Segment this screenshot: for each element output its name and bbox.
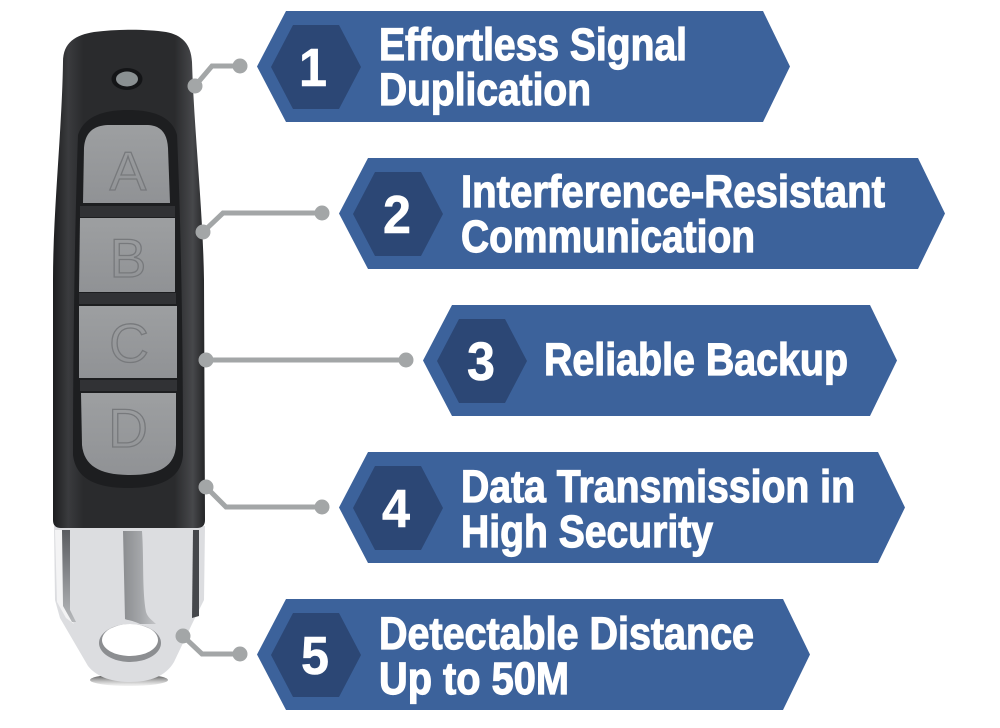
button D: D [108, 397, 148, 459]
banner 5: 5 [301, 626, 329, 686]
badge 3 [437, 319, 527, 403]
heading 5: Detectable Distance [379, 608, 754, 659]
chrome left reflection [62, 530, 76, 622]
badge 2 [353, 172, 443, 256]
heading 3: Reliable Backup [544, 334, 848, 385]
badge 4 [353, 466, 443, 550]
button recess [73, 110, 183, 488]
badge 5 [271, 613, 361, 697]
connector 2 [196, 206, 330, 240]
remote control [53, 30, 205, 686]
chrome right reflection [192, 530, 199, 618]
banner 1: 1 [299, 38, 327, 98]
banner 1 [257, 11, 790, 122]
keyring hole [99, 624, 161, 662]
banner 2: 2 [383, 185, 411, 245]
chrome centre band [123, 531, 156, 624]
banner 3: 3 [467, 332, 495, 392]
connector 3 [198, 352, 414, 368]
badge 1 [271, 25, 361, 109]
button D [81, 393, 176, 475]
heading 2: Communication [461, 211, 755, 262]
connector 1 [188, 58, 248, 94]
LED indicator [112, 68, 142, 90]
banner 2 [339, 158, 945, 269]
banner 4: 4 [382, 479, 410, 539]
button divider AB [80, 206, 175, 217]
heading 4: Data Transmission in [461, 461, 855, 512]
banner 3 [423, 305, 897, 416]
heading 4: High Security [461, 506, 713, 557]
banner 5 [257, 599, 810, 710]
heading 2: Interference-Resistant [461, 166, 885, 217]
button divider BC [79, 293, 176, 304]
button C [79, 306, 177, 378]
connector 4 [198, 480, 330, 514]
heading 5: Up to 50M [379, 653, 569, 704]
button A [83, 125, 170, 203]
banner 4 [339, 452, 905, 563]
heading 1: Effortless Signal [379, 19, 687, 70]
heading 1: Duplication [379, 64, 591, 115]
button C: C [109, 312, 149, 374]
button A: A [110, 140, 147, 202]
button divider CD [80, 380, 177, 391]
key fob shadow [90, 674, 168, 686]
chrome keyring end [54, 526, 205, 682]
chrome left edge highlight [55, 530, 74, 624]
black body [53, 30, 205, 528]
connector 5 [176, 628, 248, 662]
button B [79, 218, 175, 292]
button B: B [110, 227, 146, 289]
